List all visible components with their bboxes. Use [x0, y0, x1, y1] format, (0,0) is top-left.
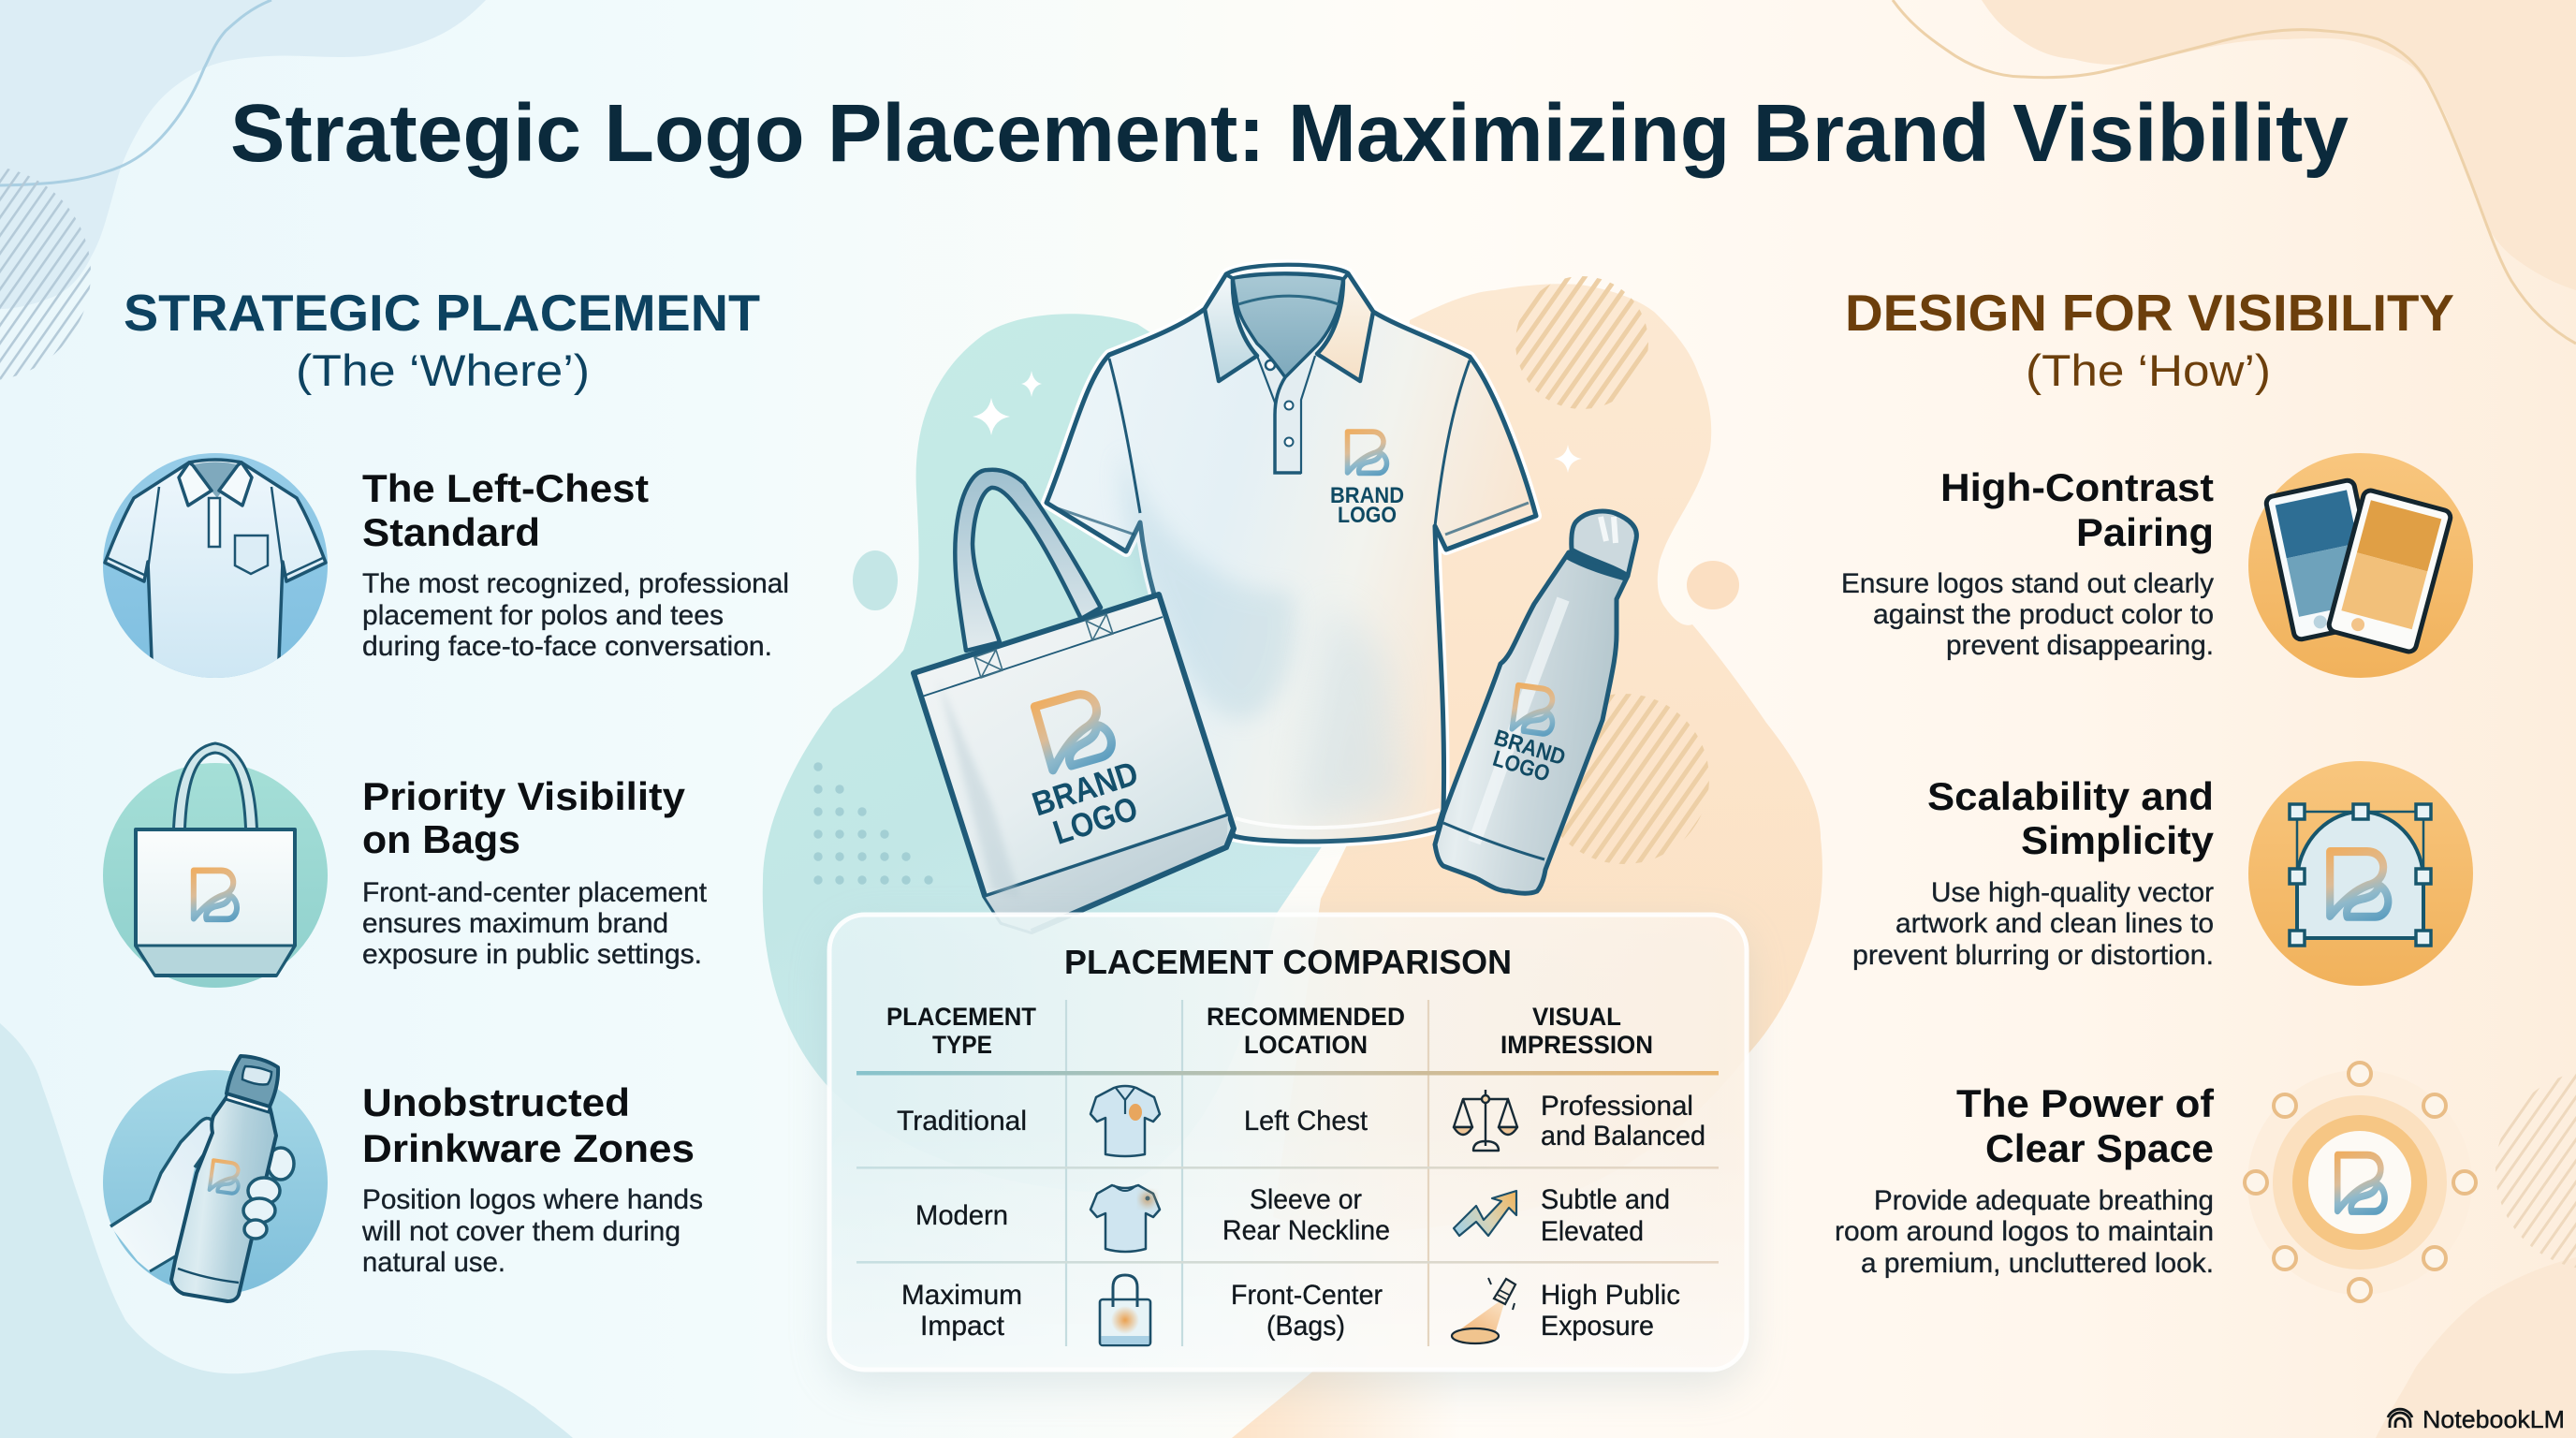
- icon: hand holding bottle: [103, 1056, 328, 1301]
- placement comparison panel: [829, 915, 1747, 1386]
- row: maximum impact: Exposure: [1541, 1311, 1654, 1342]
- hatched circle: left: [0, 166, 91, 381]
- text: priority visibility: exposure in public settings.: [362, 939, 702, 970]
- text: clear space: Clear Space: [1985, 1126, 2214, 1170]
- heading: design for visibility: DESIGN FOR VISIBILITY: [1845, 284, 2454, 342]
- right item 3: the power of clear space: [1835, 1063, 2476, 1301]
- icon: rising arrow: [1454, 1191, 1516, 1236]
- text: the left-chest standard: placement for polos and tees: [362, 600, 724, 631]
- text: the left-chest standard: The most recognized, professional: [362, 568, 789, 599]
- logo on bottle: BRAND: [1491, 726, 1568, 770]
- icon: mini polo: [1090, 1086, 1160, 1156]
- text: clear space: The Power of: [1956, 1081, 2215, 1125]
- logo on bottle: LOGO: [1490, 746, 1553, 787]
- row: maximum impact: [901, 1275, 1680, 1345]
- background blob: top left: [0, 0, 486, 309]
- text: clear space: room around logos to maintain: [1835, 1216, 2214, 1247]
- row: maximum impact: (Bags): [1266, 1311, 1345, 1342]
- heading: design for visibility: (The ‘How’): [2026, 345, 2271, 395]
- heading: strategic placement: [124, 284, 760, 395]
- left item 1: the left-chest standard: [103, 453, 789, 683]
- text: unobstructed drinkware: will not cover them during: [361, 1216, 681, 1247]
- table header: PLACEMENT: [886, 1003, 1036, 1031]
- text: the left-chest standard: during face-to-face conversation.: [362, 631, 772, 662]
- polo collar: [1205, 265, 1373, 381]
- icon: clear space rings: [2245, 1063, 2476, 1301]
- icon: polo shirt: [103, 453, 328, 683]
- row: traditional: [897, 1086, 1705, 1156]
- text: priority visibility: ensures maximum brand: [362, 908, 668, 939]
- text: scalability: prevent blurring or distortion.: [1852, 940, 2214, 971]
- left item 3: unobstructed drinkware zones: [103, 1056, 703, 1301]
- text: the left-chest standard: The Left-Chest: [362, 466, 649, 510]
- text: high-contrast: against the product color to: [1873, 599, 2214, 630]
- logo on bag: [1028, 689, 1143, 852]
- center blob: teal: [763, 314, 1357, 1192]
- icon: mini tote: [1100, 1275, 1150, 1345]
- tote bag: [914, 470, 1234, 932]
- row: modern: Rear Neckline: [1222, 1215, 1390, 1246]
- background curve: top right: [1893, 0, 2576, 344]
- background blob: bottom right: [2376, 1257, 2576, 1438]
- hatched circle: right: [2496, 1071, 2576, 1269]
- text: the left-chest standard: [362, 466, 789, 662]
- row: traditional: Professional: [1541, 1091, 1693, 1122]
- text: high-contrast: Ensure logos stand out clearly: [1841, 568, 2214, 599]
- logo on bag: BRAND: [1028, 754, 1143, 824]
- table header: VISUAL: [1532, 1003, 1621, 1031]
- text: priority visibility: Front-and-center placement: [362, 877, 708, 908]
- table header: [886, 1003, 1653, 1059]
- row: modern: Subtle and: [1541, 1184, 1670, 1215]
- icon: tote bag: [103, 743, 328, 988]
- icon: vector selection frame: [2248, 761, 2473, 986]
- text: priority visibility: on Bags: [362, 817, 520, 861]
- row: traditional: Left Chest: [1244, 1106, 1368, 1137]
- text: unobstructed drinkware: [361, 1080, 703, 1278]
- table header: TYPE: [932, 1031, 992, 1059]
- icon: balance scales: [1454, 1090, 1517, 1151]
- table title: PLACEMENT COMPARISON: [1064, 943, 1512, 981]
- row: modern: Elevated: [1541, 1216, 1644, 1247]
- icon: spotlight: [1452, 1278, 1515, 1343]
- row: maximum impact: Front-Center: [1231, 1280, 1383, 1311]
- text: priority visibility: Priority Visibility: [362, 774, 686, 818]
- polo placket: [1257, 356, 1315, 473]
- text: scalability: Scalability and: [1927, 774, 2214, 818]
- logo on bottle: [1490, 685, 1568, 787]
- blob: teal oval: [853, 550, 898, 610]
- center blob: peach: [1273, 284, 1822, 1231]
- dot grid: [813, 762, 933, 885]
- stainless bottle: [1435, 511, 1636, 893]
- text: high-contrast: Pairing: [2076, 510, 2214, 554]
- text: unobstructed drinkware: Unobstructed: [362, 1080, 630, 1124]
- sparkles: [973, 371, 1582, 473]
- hatched circle: center top: [1515, 276, 1648, 409]
- text: scalability: artwork and clean lines to: [1895, 908, 2214, 939]
- text: high-contrast: High-Contrast: [1940, 465, 2214, 509]
- text: unobstructed drinkware: Drinkware Zones: [362, 1126, 695, 1170]
- text: high-contrast: prevent disappearing.: [1946, 630, 2214, 661]
- background blob: top right: [1982, 0, 2576, 290]
- text: scalability: [1852, 774, 2215, 971]
- row: maximum impact: Impact: [920, 1311, 1005, 1342]
- logo on polo: BRAND: [1330, 483, 1404, 508]
- right item 2: scalability and simplicity: [1852, 761, 2473, 986]
- text: clear space: [1835, 1081, 2215, 1279]
- logo on polo: [1330, 432, 1404, 528]
- row: traditional: and Balanced: [1541, 1121, 1705, 1152]
- text: scalability: Use high-quality vector: [1931, 877, 2214, 908]
- logo on bag: LOGO: [1048, 788, 1142, 852]
- table header: IMPRESSION: [1500, 1031, 1653, 1059]
- right item 1: high-contrast pairing: [1841, 453, 2473, 678]
- row: maximum impact: Maximum: [901, 1280, 1022, 1311]
- text: the left-chest standard: Standard: [362, 510, 540, 554]
- heading: strategic placement: STRATEGIC PLACEMENT: [124, 284, 760, 342]
- hatched circle: center lower: [1539, 694, 1709, 864]
- heading: strategic placement: (The ‘Where’): [296, 345, 590, 395]
- logo on polo: LOGO: [1338, 503, 1397, 528]
- left item 2: priority visibility on bags: [103, 743, 708, 988]
- table header: RECOMMENDED: [1207, 1003, 1405, 1031]
- row: modern: Modern: [915, 1200, 1008, 1231]
- text: unobstructed drinkware: Position logos where hands: [362, 1184, 703, 1215]
- background blob: bottom left: [0, 1023, 573, 1438]
- NotebookLM watermark: NotebookLM: [2422, 1405, 2565, 1433]
- text: clear space: Provide adequate breathing: [1874, 1185, 2214, 1216]
- background curve: top left: [0, 0, 271, 185]
- polo shirt: [1046, 265, 1536, 842]
- row: maximum impact: High Public: [1541, 1280, 1680, 1311]
- icon: colour swatches: [2248, 453, 2473, 678]
- text: unobstructed drinkware: natural use.: [362, 1247, 505, 1278]
- row: modern: [915, 1184, 1670, 1252]
- blob: peach oval: [1687, 561, 1739, 609]
- center blob: peach wedge below table: [1232, 1370, 1460, 1438]
- title: Strategic Logo Placement: Maximizing Brand Visibility: [230, 88, 2349, 179]
- table header: LOCATION: [1244, 1031, 1368, 1059]
- icon: mini tee: [1090, 1185, 1160, 1252]
- text: scalability: Simplicity: [2021, 818, 2215, 862]
- row: modern: Sleeve or: [1250, 1184, 1362, 1215]
- text: high-contrast: [1841, 465, 2214, 661]
- polo neck opening: [1233, 274, 1343, 377]
- row: traditional: Traditional: [897, 1106, 1027, 1137]
- text: clear space: a premium, uncluttered look.: [1861, 1248, 2214, 1279]
- text: priority visibility: [362, 774, 708, 970]
- heading: design for visibility: [1845, 284, 2454, 395]
